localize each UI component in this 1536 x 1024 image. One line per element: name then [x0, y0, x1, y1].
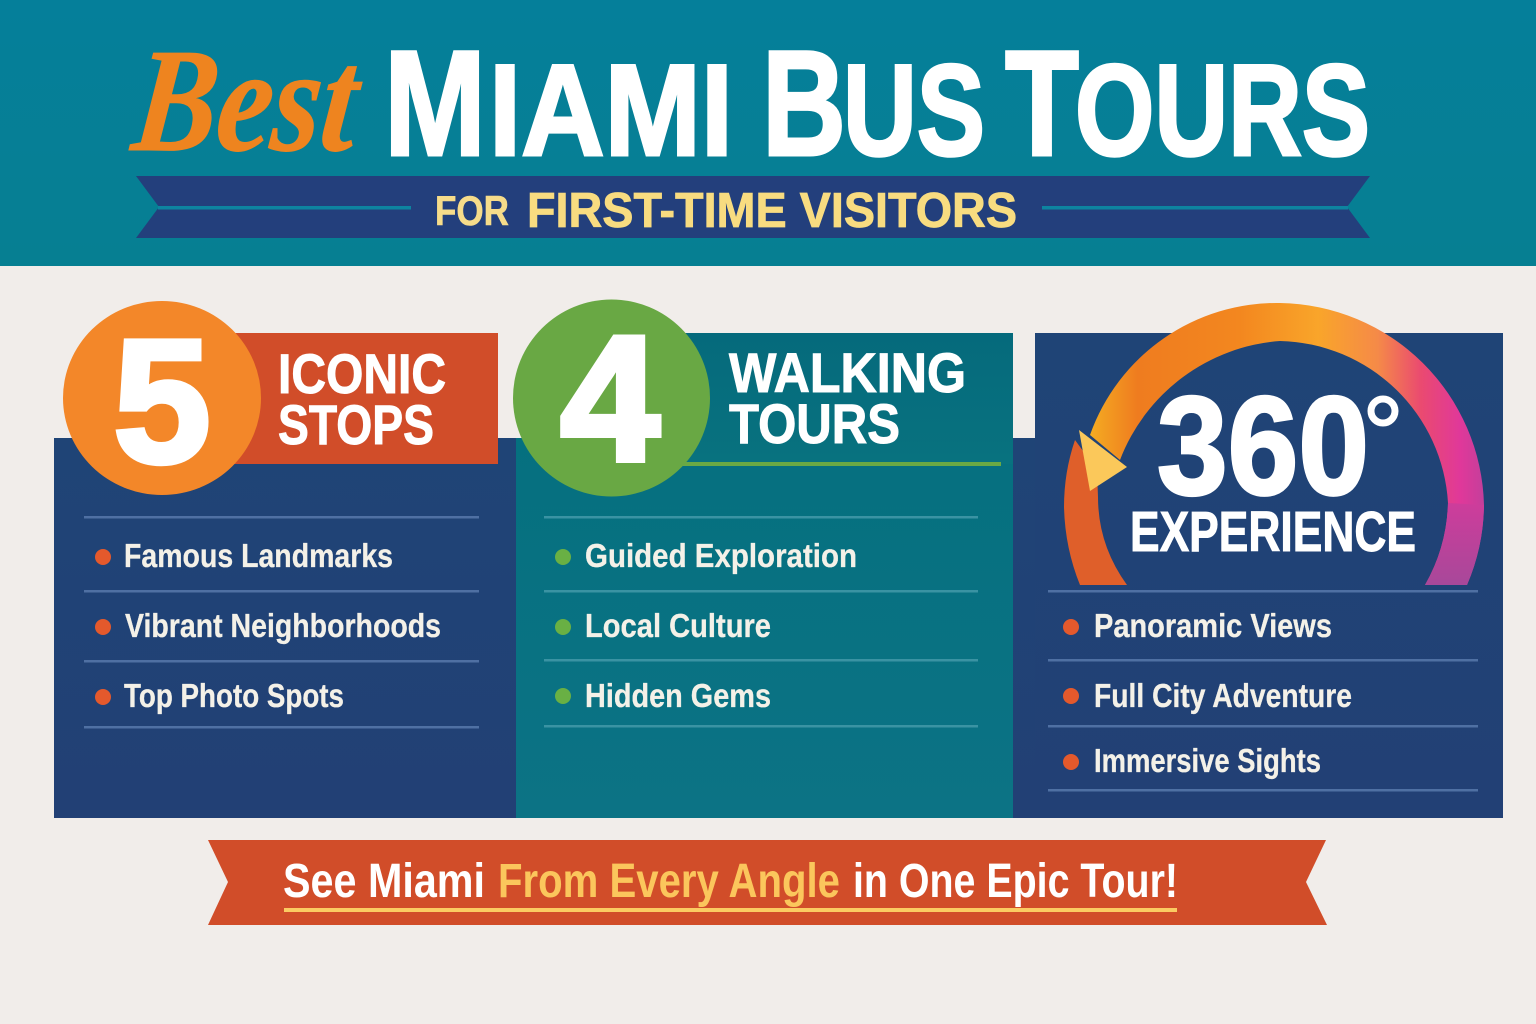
panel: 5 iconic stops [54, 301, 516, 818]
list: Local Culture [585, 607, 771, 644]
title: Miami Bus Tours: US [843, 37, 985, 183]
list: Top Photo Spots [124, 677, 344, 714]
title: Miami Bus Tours: B [762, 19, 846, 187]
number badge: 4 [513, 299, 710, 498]
list: Immersive Sights [1094, 742, 1321, 779]
heading: experience: EXPERIENCE [1130, 500, 1416, 564]
list: Vibrant Neighborhoods [125, 607, 441, 644]
title: Miami Bus Tours [384, 19, 1370, 187]
list: Hidden Gems [585, 677, 771, 714]
heading text: STOPS [278, 393, 434, 456]
heading text: TOURS [729, 392, 900, 455]
title: Miami Bus Tours: OURS [1075, 37, 1370, 183]
number badge: 5: 5 [113, 304, 211, 500]
heading text: ICONIC [278, 342, 446, 405]
banner text: See Miami [283, 855, 485, 908]
title: Miami Bus Tours: IAMI [489, 37, 733, 183]
heading text: WALKING [729, 341, 966, 404]
list [544, 516, 978, 728]
number badge: 4: 4 [560, 299, 660, 498]
list: Full City Adventure [1094, 677, 1352, 714]
list: Famous Landmarks [124, 537, 393, 574]
heading: 360°: 360 [1157, 367, 1369, 524]
subtitle ribbon [136, 176, 1370, 238]
list [84, 516, 479, 728]
heading banner [230, 333, 498, 464]
title: Best: Best [125, 19, 369, 183]
banner text: in One Epic Tour! [853, 855, 1178, 908]
list [1048, 590, 1478, 792]
list: Guided Exploration [585, 537, 857, 574]
title: Miami Bus Tours: M [384, 19, 486, 187]
bottom banner [208, 840, 1327, 925]
panel: 4 walking tours [513, 299, 1013, 818]
subtitle text: FIRST-TIME VISITORS [527, 184, 1017, 238]
panel: 360 experience [1013, 303, 1503, 818]
list: Panoramic Views [1094, 607, 1332, 644]
icon: circular arrow [1064, 303, 1484, 585]
banner text: From Every Angle [498, 855, 840, 908]
number badge: 5 [63, 301, 261, 500]
header band [0, 0, 1536, 266]
subtitle text: FOR [435, 187, 509, 234]
title: Miami Bus Tours: T [1005, 19, 1079, 187]
banner text [283, 855, 1178, 908]
